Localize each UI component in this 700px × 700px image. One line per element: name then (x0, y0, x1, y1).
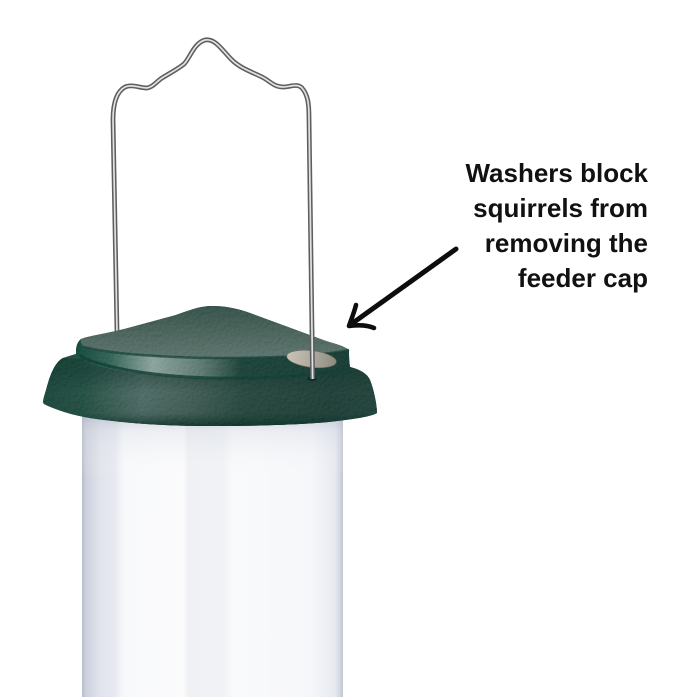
callout text: removing the (485, 228, 648, 258)
feeder cap (40, 300, 382, 430)
dome lower shadow (84, 347, 349, 358)
callout text: Washers block (465, 158, 649, 188)
callout text (465, 158, 649, 293)
hanger pin (310, 330, 315, 379)
cap dome (81, 306, 349, 358)
hole in cap (307, 377, 317, 381)
cap brim (43, 350, 377, 426)
rim shadow groove (80, 356, 350, 378)
washer and hanger pin (286, 330, 337, 381)
cap brim shading (43, 358, 377, 426)
hammered texture (40, 300, 382, 430)
cap silhouette (43, 306, 377, 426)
callout text: feeder cap (518, 263, 648, 293)
callout arrow (349, 249, 456, 328)
wire hanger (113, 40, 312, 332)
washer disc (286, 348, 337, 370)
callout text: squirrels from (473, 193, 648, 223)
cap raised rim (76, 339, 350, 379)
clear feeder tube (82, 412, 343, 697)
